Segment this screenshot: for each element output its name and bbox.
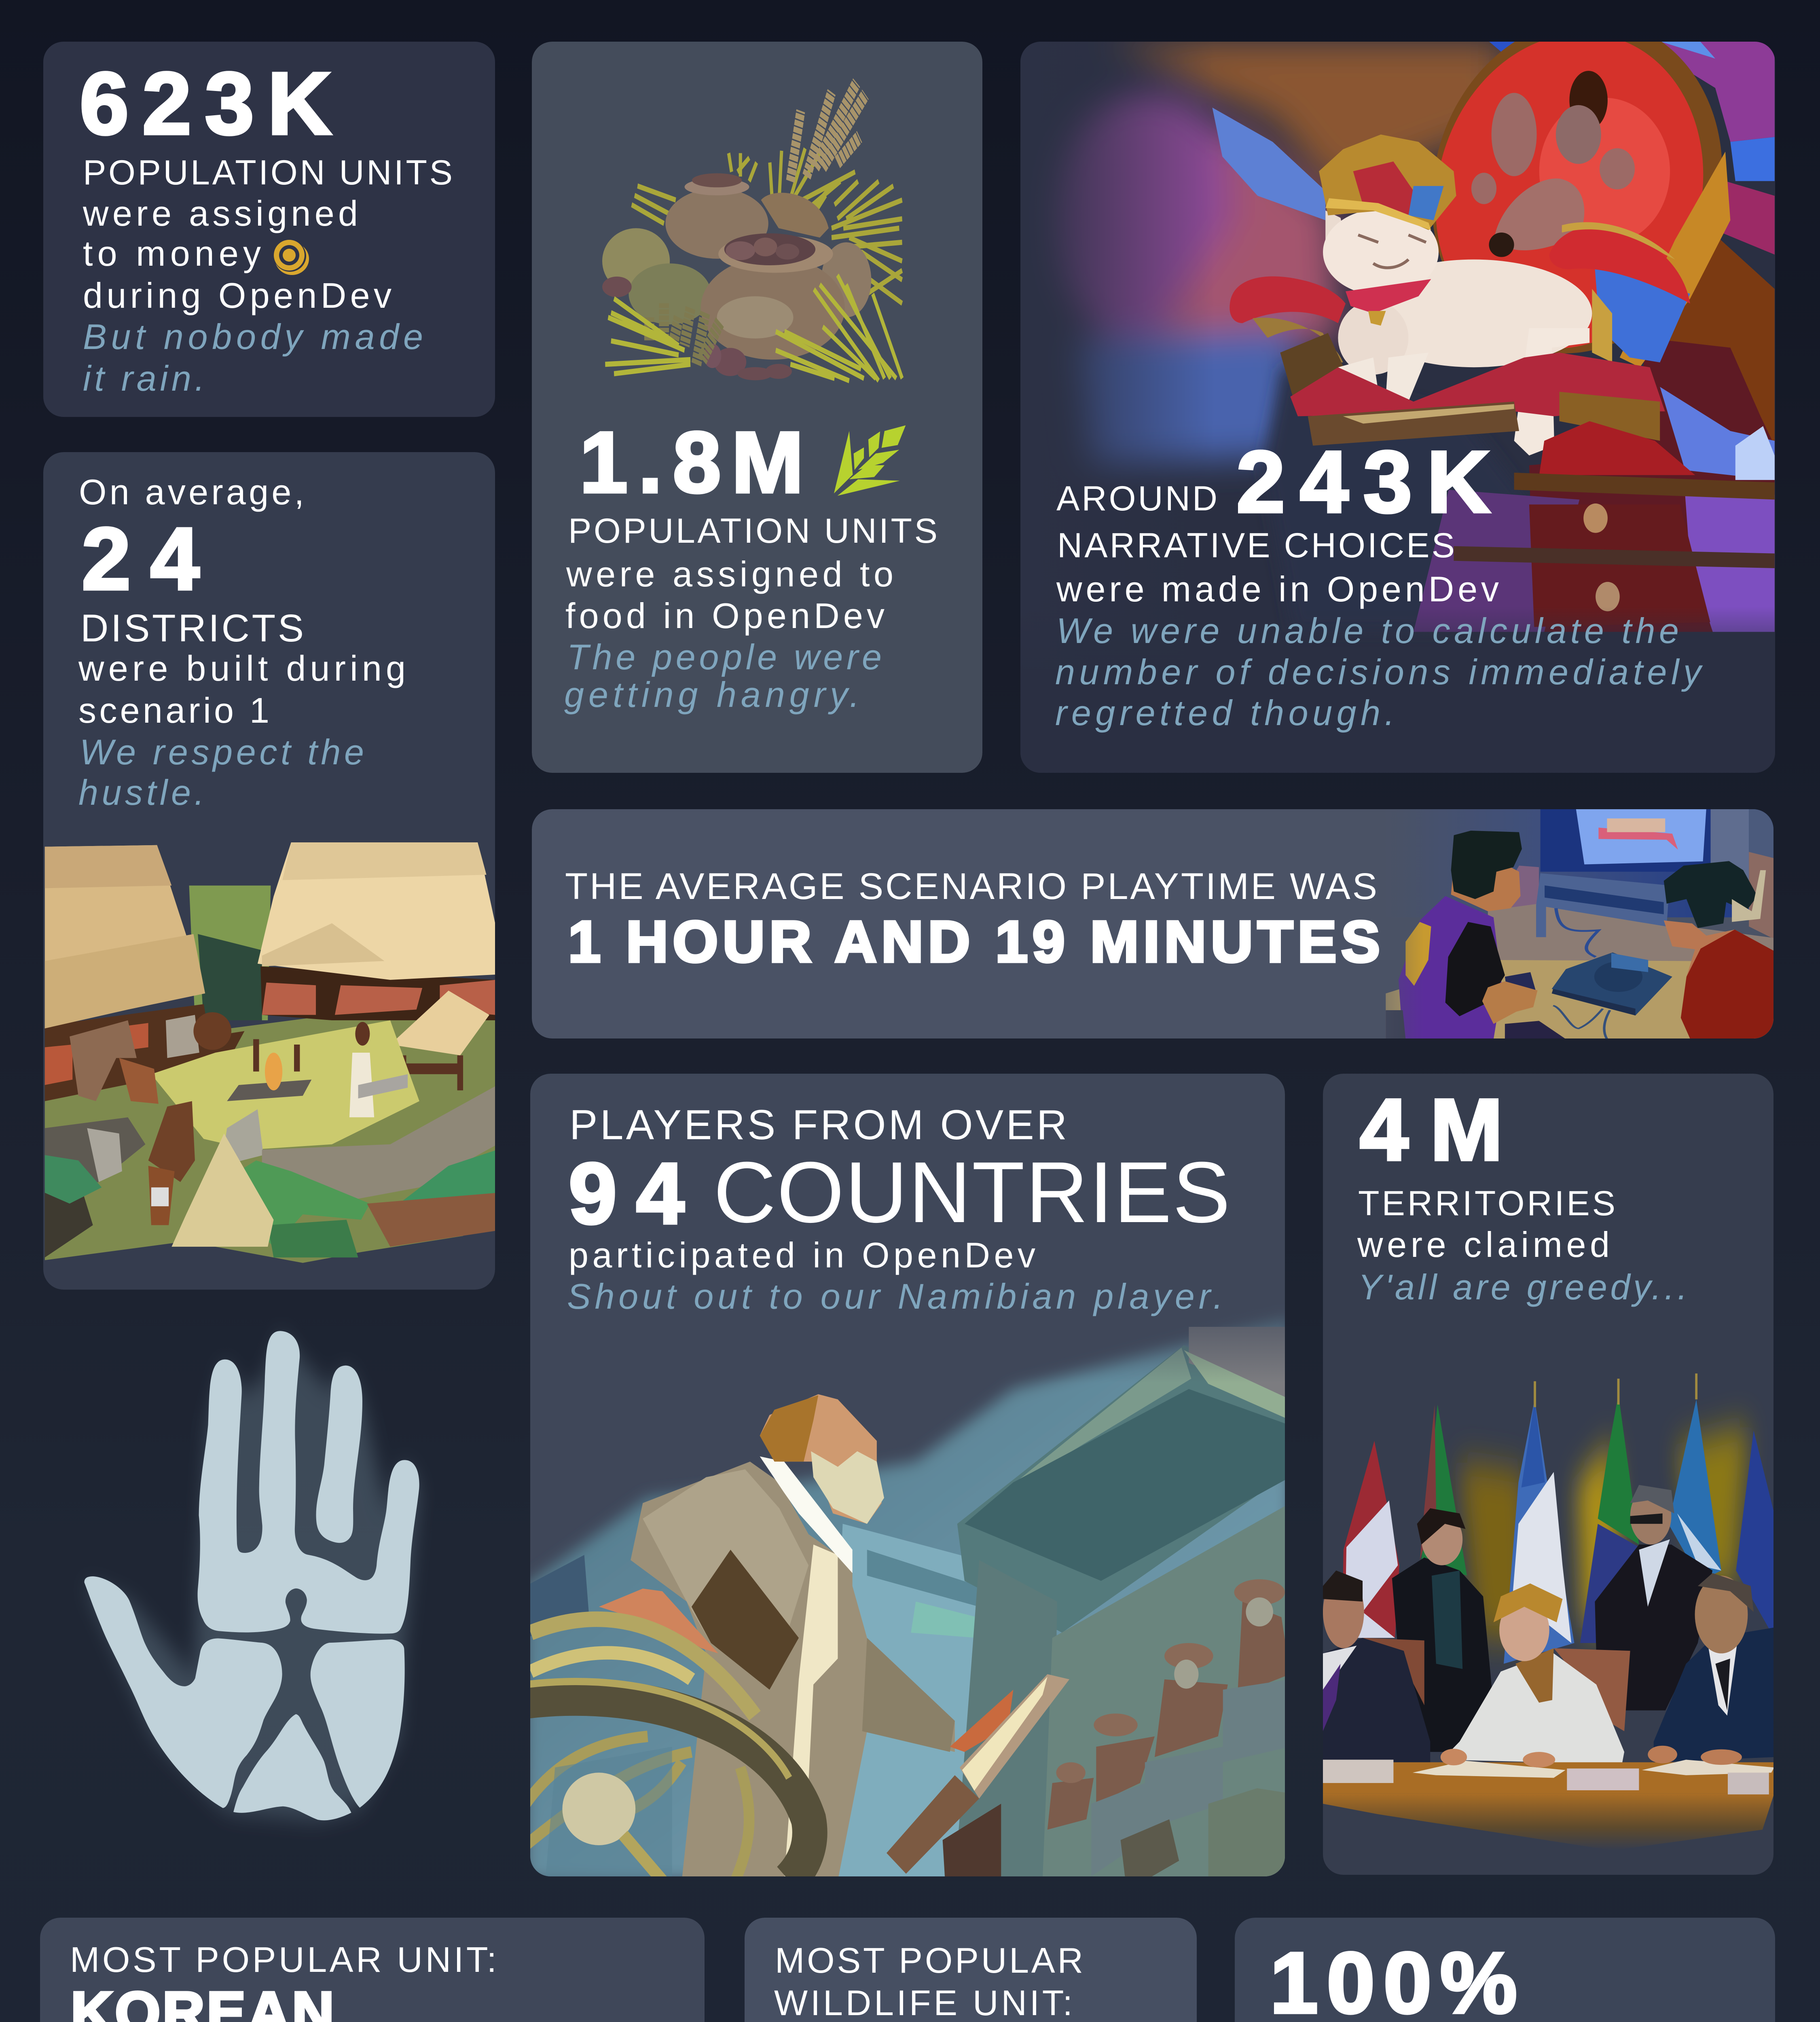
- joke caption: number of decisions immediately: [1055, 652, 1703, 692]
- joke caption: Shout out to our Namibian player.: [567, 1276, 1223, 1316]
- joke caption: The people were: [567, 637, 882, 677]
- heading: THE AVERAGE SCENARIO PLAYTIME WAS: [565, 866, 1377, 907]
- joke caption: We respect the: [80, 732, 364, 772]
- description: participated in OpenDev: [569, 1235, 1035, 1275]
- joke caption: We were unable to calculate the: [1056, 611, 1679, 651]
- panel: 24 districts: [43, 452, 497, 1290]
- heading: WILDLIFE UNIT:: [774, 1983, 1073, 2022]
- card background: [1020, 42, 1775, 773]
- heading: MOST POPULAR UNIT:: [70, 1940, 497, 1980]
- panel: mammoths: [745, 1918, 1197, 2022]
- stat: 4M: 4M: [1360, 1081, 1503, 1178]
- description: [78, 607, 406, 730]
- description: were made in OpenDev: [1056, 569, 1499, 609]
- heading: PLAYERS FROM OVER: [569, 1102, 1067, 1148]
- description: NARRATIVE CHOICES: [1057, 526, 1455, 565]
- description: were built during: [78, 648, 406, 688]
- heading: MOST POPULAR: [775, 1940, 1083, 1980]
- panel: 623K population to money: [43, 42, 495, 417]
- description: were assigned: [83, 193, 358, 233]
- stat: 94 countries: 94: [569, 1145, 684, 1242]
- stat: playtime: 1 HOUR AND 19 MINUTES: [568, 909, 1380, 974]
- heading: on average: On average,: [79, 472, 304, 512]
- description: scenario 1: [78, 690, 269, 730]
- panel: Korean gunners: [36, 1918, 708, 2022]
- card background: [1323, 1074, 1773, 1875]
- description: food in OpenDev: [565, 596, 885, 636]
- stat line: around 243K: 243K: [1236, 433, 1490, 531]
- card background: [532, 42, 982, 773]
- card background: [43, 452, 495, 1290]
- description: were claimed: [1357, 1225, 1610, 1265]
- joke caption: [78, 732, 364, 812]
- description: [565, 512, 938, 636]
- illustration: treaty signing: [1323, 1373, 1774, 1851]
- logo glow: [84, 1331, 419, 1820]
- card background: [530, 1074, 1285, 1876]
- illustration: pots and grain: [602, 82, 902, 381]
- lower fade: [1020, 607, 1775, 683]
- stat: 94 countries: COUNTRIES: [713, 1144, 1230, 1241]
- panel: 100% awesome: [1235, 1918, 1777, 2022]
- description: [1357, 1184, 1615, 1265]
- card background: [745, 1918, 1197, 2022]
- icon: green wheat: [834, 425, 906, 496]
- stat: 623K: 623K: [80, 55, 331, 153]
- description: were assigned to: [566, 554, 893, 594]
- joke caption: regretted though.: [1055, 693, 1395, 733]
- card background: [40, 1918, 705, 2022]
- illustration: village: [45, 842, 497, 1263]
- logo: hand with human figure: [84, 1331, 419, 1820]
- left fade: [1020, 42, 1215, 773]
- stat line: around 243K: [1056, 433, 1490, 531]
- description: [83, 153, 453, 315]
- stat: 1.8M: 1.8M: [580, 414, 804, 511]
- top fade: [530, 1278, 1285, 1383]
- lower panel fill: [1020, 683, 1775, 773]
- description: during OpenDev: [83, 275, 392, 315]
- illustration: astronomer with armillary sphere: [526, 1316, 1290, 1880]
- description: TERRITORIES: [1358, 1184, 1615, 1223]
- joke caption: Y'all are greedy...: [1358, 1267, 1687, 1307]
- joke caption: [83, 317, 423, 398]
- heading: [774, 1940, 1083, 2022]
- illustration: cat on throne: [1046, 0, 1775, 632]
- panel: average playtime: [532, 808, 1780, 1043]
- stat: 24: 24: [82, 510, 199, 608]
- joke caption: hustle.: [78, 772, 204, 812]
- description: POPULATION UNITS: [83, 153, 453, 192]
- joke caption: it rain.: [83, 358, 205, 398]
- description: to money: [83, 233, 261, 273]
- panel: 94 countries: [526, 1074, 1290, 1880]
- joke caption: But nobody made: [83, 317, 423, 357]
- panel: 1.8M food: [532, 42, 982, 773]
- illustration: kids playing console: [1383, 808, 1780, 1043]
- panel: 243K narrative choices: [1020, 0, 1775, 773]
- joke caption: [1055, 611, 1703, 733]
- card background: [532, 809, 1773, 1038]
- description: POPULATION UNITS: [568, 512, 938, 550]
- stat line: around 243K: AROUND: [1056, 479, 1217, 518]
- joke caption: getting hangry.: [564, 675, 859, 715]
- icon: gold coin: [274, 240, 309, 275]
- logo shapes: [84, 1331, 419, 1820]
- card background: [1235, 1918, 1775, 2022]
- panel: 4M territories: [1323, 1074, 1774, 1875]
- card background: [43, 42, 495, 417]
- description: [1056, 526, 1499, 609]
- description: DISTRICTS: [80, 607, 304, 650]
- left fade: [1335, 809, 1424, 1038]
- joke caption: [564, 637, 882, 715]
